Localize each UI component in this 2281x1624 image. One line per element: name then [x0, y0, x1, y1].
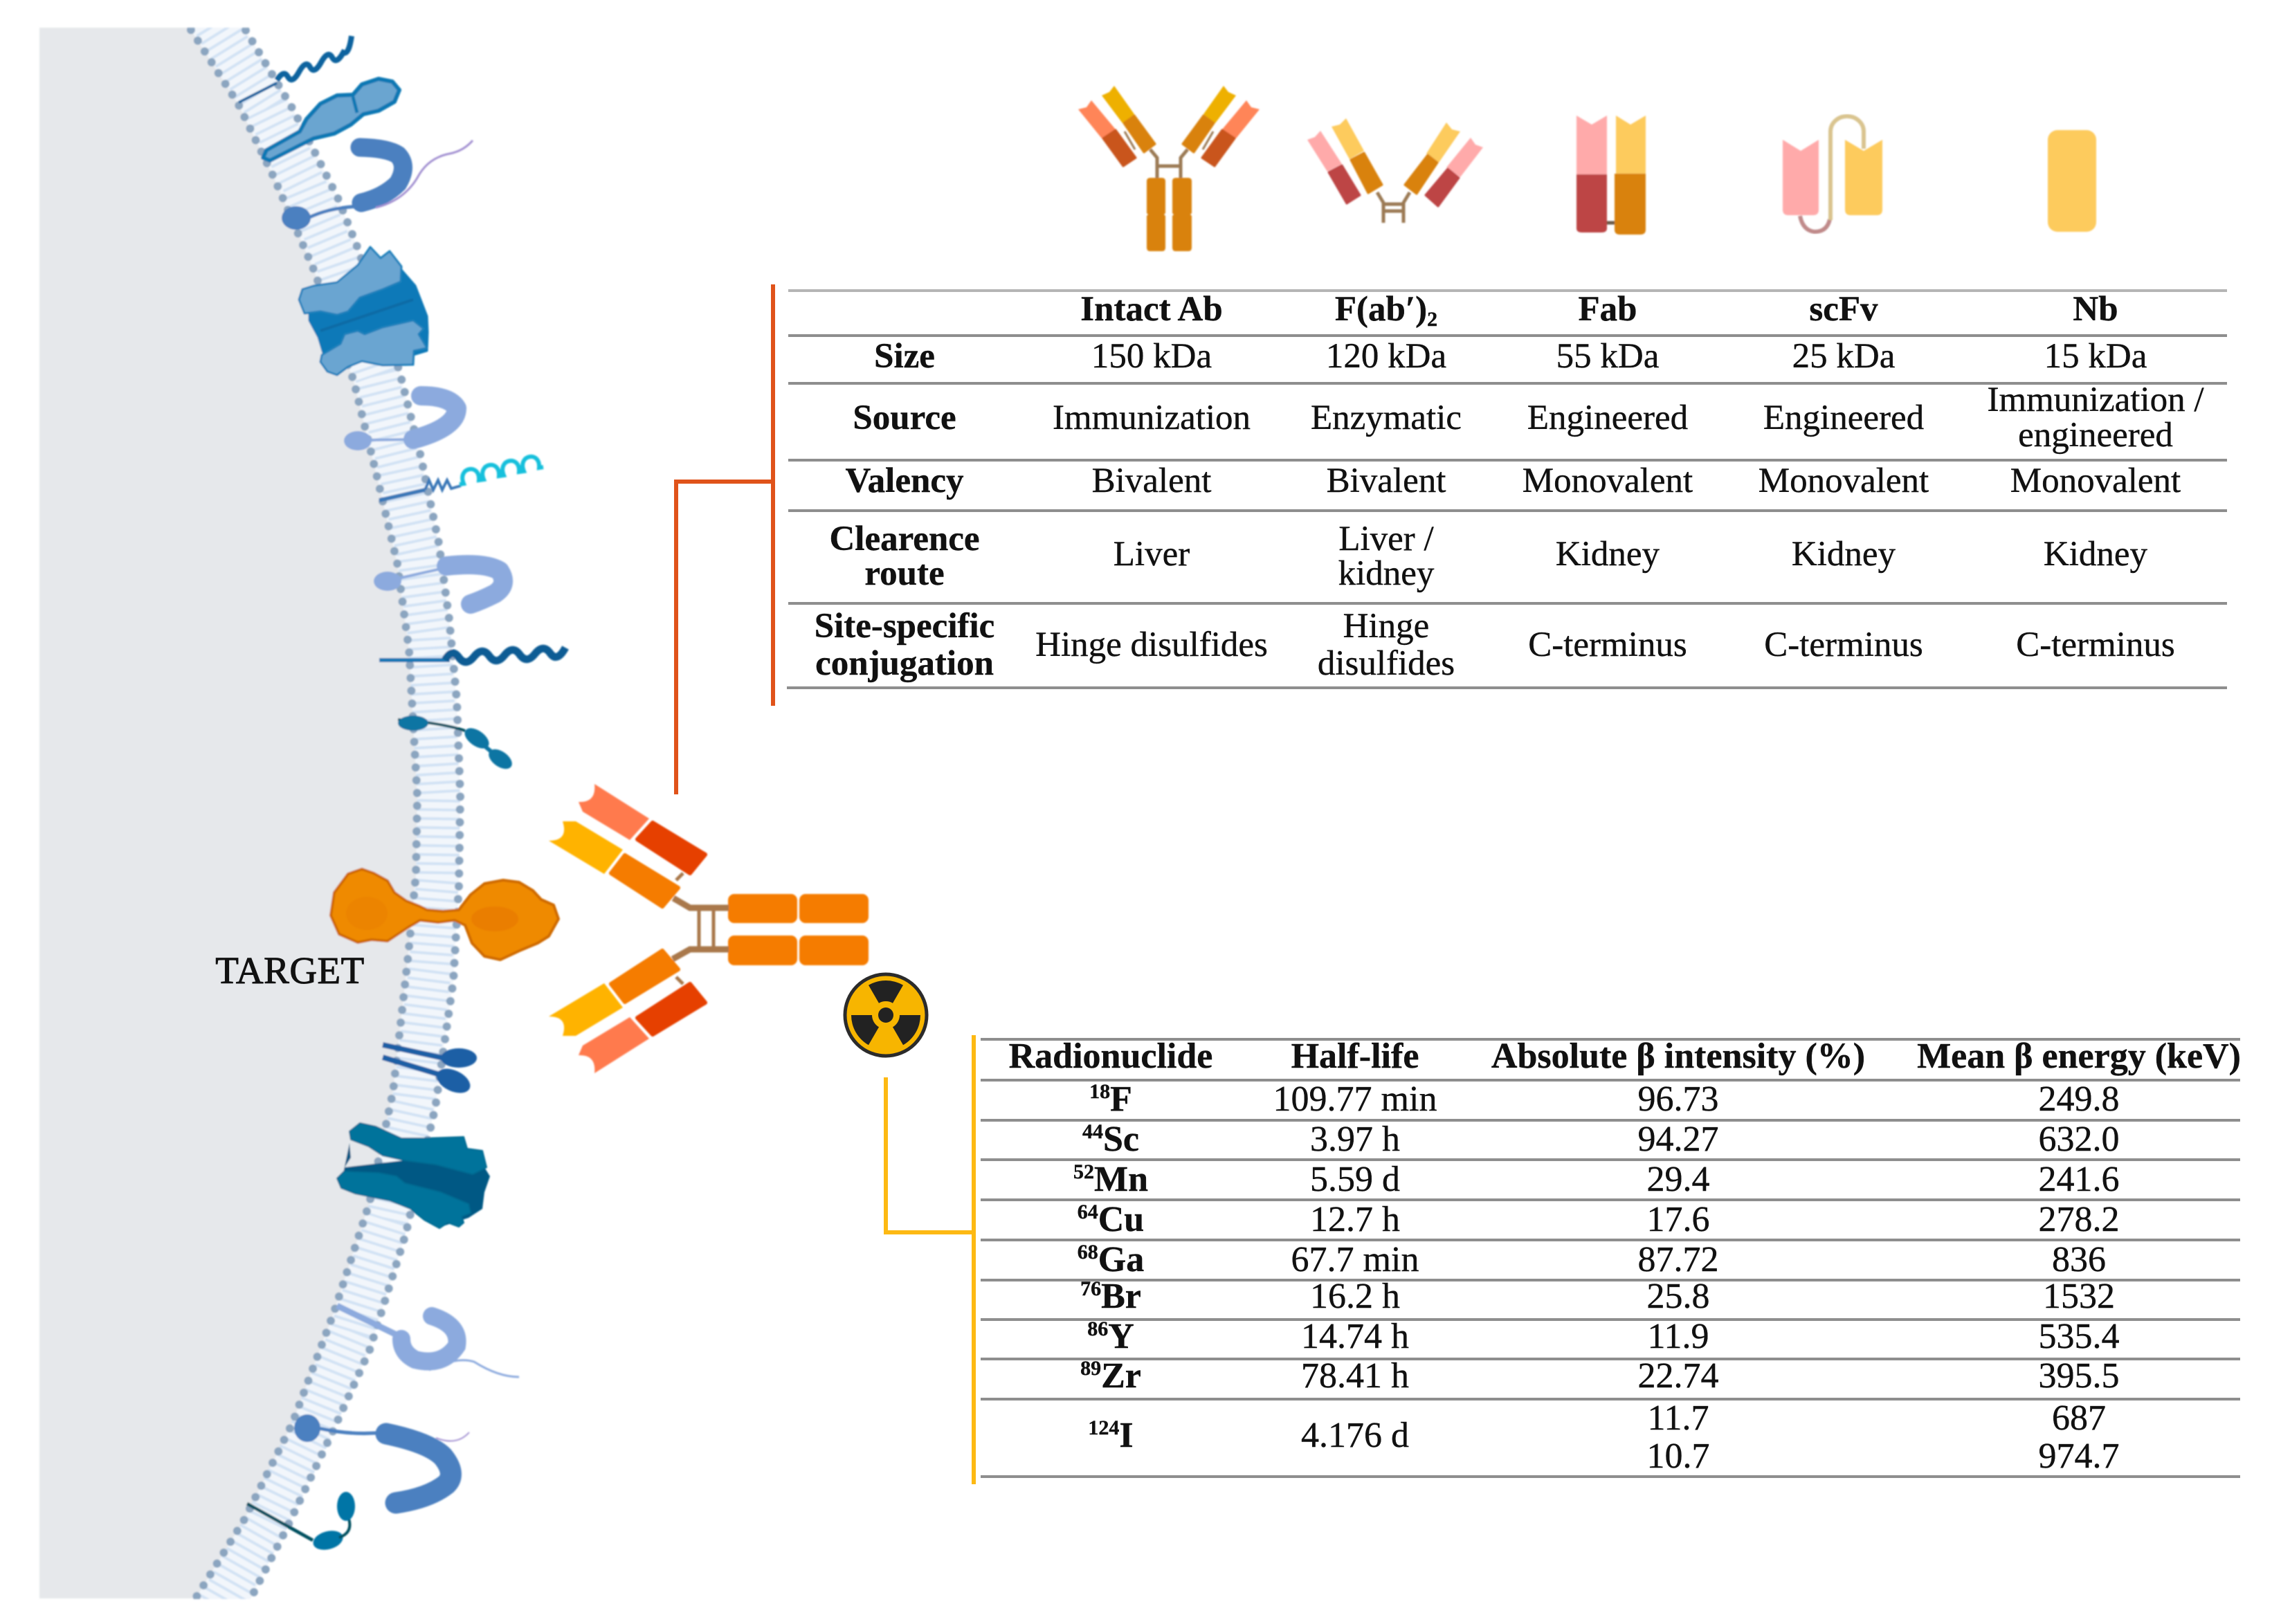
row: 89Zr: 22.74: [1637, 1356, 1719, 1396]
row: source: [853, 381, 2204, 455]
row: 68Ga: 68: [1078, 1241, 1098, 1263]
protein: teal bottom receptor: [247, 1492, 355, 1553]
row: 76Br: [1080, 1277, 2115, 1316]
row: 18F: 249.8: [2039, 1079, 2119, 1119]
row: 86Y: 535.4: [2039, 1317, 2119, 1356]
row: 86Y: 86: [1087, 1317, 1108, 1340]
row: 86Y: 11.9: [1647, 1317, 1709, 1356]
protein: dark blue receptor: [282, 140, 473, 230]
row: clearance route: Liver: [1114, 535, 1190, 574]
row: 18F: 96.73: [1637, 1079, 1719, 1119]
row: size: 15 kDa: [2044, 337, 2147, 376]
table header row: Nb: [2073, 290, 2118, 329]
row: 52Mn: Mn: [1094, 1160, 1148, 1199]
row: 52Mn: 241.6: [2039, 1160, 2119, 1199]
protein: light blue receptor 1: [344, 396, 457, 450]
row: 44Sc: Sc: [1103, 1120, 1139, 1159]
protein: teal three-domain receptor: [398, 715, 516, 773]
lipid bilayer: [177, 8, 460, 1612]
row: 64Cu: Cu: [1098, 1200, 1144, 1239]
row: 18F: 18: [1089, 1080, 1110, 1103]
row: 124I: I: [1119, 1416, 1134, 1455]
row: 44Sc: 44: [1082, 1120, 1103, 1143]
table header row: Mean β energy (keV): [1917, 1037, 2241, 1076]
antibody lower Fab arm: [549, 951, 705, 1073]
row: valency: Monovalent: [2010, 462, 2181, 500]
row: 68Ga: 836: [2052, 1240, 2106, 1279]
row: 68Ga: 67.7 min: [1291, 1240, 1419, 1279]
icon: Fab fragment: [1576, 116, 1646, 235]
protein: dark blue receptor bottom: [294, 1414, 469, 1503]
protein: top helix: [239, 36, 352, 102]
row: 64Cu: [1078, 1200, 2119, 1239]
row: source: Immunization /: [1987, 381, 2204, 419]
protein: light blue hook receptor: [337, 1306, 519, 1377]
row: valency: Monovalent: [1523, 462, 1693, 500]
antibody Fc domains: [728, 894, 869, 965]
table header row: [1080, 290, 2118, 331]
row: source: Immunization: [1053, 399, 1251, 437]
row: 86Y: 14.74 h: [1301, 1317, 1409, 1356]
row: 86Y: [1087, 1317, 2119, 1356]
icon: intact antibody: [1078, 86, 1260, 251]
row: site-specific conjugation: Hinge: [1343, 607, 1429, 646]
icon: nanobody: [2048, 130, 2096, 232]
row: 44Sc: [1082, 1120, 2119, 1159]
cell membrane panel: [39, 8, 565, 1612]
row: 124I: 974.7: [2039, 1436, 2119, 1476]
protein: long helix: [379, 648, 565, 662]
row: site-specific conjugation: Hinge disulfides: [1035, 626, 1268, 664]
row: 124I: [1088, 1398, 2119, 1476]
row: 76Br: 25.8: [1647, 1277, 1709, 1316]
row: 44Sc: 94.27: [1637, 1120, 1719, 1159]
row: source: Engineered: [1527, 399, 1688, 437]
row: 52Mn: 5.59 d: [1310, 1160, 1400, 1199]
row: site-specific conjugation: C-terminus: [1528, 626, 1687, 664]
row: 68Ga: Ga: [1098, 1240, 1144, 1279]
row: 86Y: Y: [1108, 1317, 1134, 1356]
row: clearance route: [829, 520, 2148, 593]
icon: scFv fragment: [1783, 116, 1882, 232]
row: source: Source: [853, 399, 956, 437]
row: valency: [846, 462, 2181, 500]
row: clearance route: kidney: [1338, 554, 1435, 593]
protein: blue channel: [299, 247, 428, 375]
row: site-specific conjugation: C-terminus: [1764, 626, 1923, 664]
row: valency: Monovalent: [1759, 462, 1929, 500]
row: 68Ga: [1078, 1240, 2106, 1279]
row: 76Br: 16.2 h: [1310, 1277, 1400, 1316]
row: 89Zr: Zr: [1101, 1356, 1141, 1396]
table rules: [981, 1039, 2240, 1477]
bracket: orange connector to antibody format table: [676, 284, 773, 794]
row: valency: Bivalent: [1092, 462, 1211, 500]
antibody hinge: [673, 898, 729, 959]
row: 68Ga: 87.72: [1637, 1240, 1719, 1279]
row: 18F: F: [1110, 1079, 1132, 1119]
table header row: scFv: [1809, 290, 1878, 329]
protein: orange target: [331, 869, 558, 960]
row: 44Sc: 3.97 h: [1310, 1120, 1400, 1159]
table: antibody formats: [787, 290, 2227, 688]
table header row: Half-life: [1291, 1037, 1419, 1076]
row: 64Cu: 12.7 h: [1310, 1200, 1400, 1239]
row: size: [874, 337, 2147, 376]
icon: F(ab')2 fragment: [1307, 118, 1483, 223]
protein: teal channel: [337, 1123, 490, 1228]
table header row: Absolute β intensity (%): [1491, 1037, 1865, 1076]
row: size: 55 kDa: [1556, 337, 1659, 376]
protein: elongated receptor: [263, 79, 399, 161]
row: clearance route: Kidney: [1556, 535, 1660, 574]
table rules: [787, 291, 2227, 688]
table header row: F(ab′): [1335, 290, 1427, 329]
label: target: TARGET: [215, 949, 365, 992]
row: 89Zr: 78.41 h: [1301, 1356, 1409, 1396]
row: 44Sc: 632.0: [2039, 1120, 2119, 1159]
row: 18F: 109.77 min: [1273, 1079, 1437, 1119]
table: radionuclides: [981, 1037, 2241, 1477]
protein: helix with cyan loops: [379, 457, 543, 500]
row: 52Mn: [1073, 1160, 2119, 1199]
table header row: Intact Ab: [1080, 290, 1223, 329]
main antibody: [549, 784, 869, 1073]
table header row: 2: [1427, 308, 1437, 331]
row: 124I: 10.7: [1647, 1436, 1709, 1476]
antibody upper Fab arm: [549, 784, 705, 906]
protein: small double receptor: [383, 1045, 477, 1098]
row: site-specific conjugation: Site-specific: [815, 607, 994, 646]
row: clearance route: route: [864, 554, 945, 593]
row: 52Mn: 29.4: [1647, 1160, 1709, 1199]
row: 89Zr: 89: [1080, 1357, 1101, 1380]
row: 64Cu: 64: [1078, 1201, 1098, 1223]
row: source: Engineered: [1763, 399, 1924, 437]
row: 64Cu: 17.6: [1647, 1200, 1709, 1239]
row: site-specific conjugation: conjugation: [815, 644, 994, 683]
row: 64Cu: 278.2: [2039, 1200, 2119, 1239]
row: source: Enzymatic: [1311, 399, 1462, 437]
cell interior: [39, 28, 417, 1598]
row: clearance route: Liver /: [1338, 520, 1435, 558]
row: 52Mn: 52: [1073, 1160, 1094, 1183]
row: 124I: 11.7: [1647, 1398, 1709, 1438]
row: clearance route: Clearence: [829, 520, 980, 558]
row: size: 25 kDa: [1792, 337, 1895, 376]
row: 76Br: 1532: [2043, 1277, 2115, 1316]
row: 76Br: Br: [1101, 1277, 1141, 1316]
bracket: yellow connector to radionuclide table: [886, 1035, 974, 1484]
protein: light blue receptor 2: [374, 565, 503, 604]
row: site-specific conjugation: disulfides: [1318, 644, 1455, 683]
row: clearance route: Kidney: [2044, 535, 2148, 574]
row: 89Zr: [1080, 1356, 2119, 1396]
table header row: Fab: [1578, 290, 1637, 329]
row: size: Size: [874, 337, 935, 376]
row: site-specific conjugation: [815, 607, 2175, 683]
row: 89Zr: 395.5: [2039, 1356, 2119, 1396]
row: size: 150 kDa: [1091, 337, 1212, 376]
table header row: [1009, 1037, 2241, 1076]
row: clearance route: Kidney: [1792, 535, 1896, 574]
row: 18F: [1089, 1079, 2119, 1119]
row: 124I: 687: [2052, 1398, 2106, 1438]
row: valency: Bivalent: [1327, 462, 1446, 500]
row: source: engineered: [2018, 416, 2173, 455]
row: 124I: 124: [1088, 1416, 1119, 1439]
row: 76Br: 76: [1080, 1277, 1101, 1300]
row: valency: Valency: [846, 462, 963, 500]
icon: radiation symbol: [845, 974, 927, 1056]
row: size: 120 kDa: [1326, 337, 1446, 376]
table header row: Radionuclide: [1009, 1037, 1212, 1076]
row: site-specific conjugation: C-terminus: [2016, 626, 2175, 664]
row: 124I: 4.176 d: [1301, 1416, 1409, 1455]
